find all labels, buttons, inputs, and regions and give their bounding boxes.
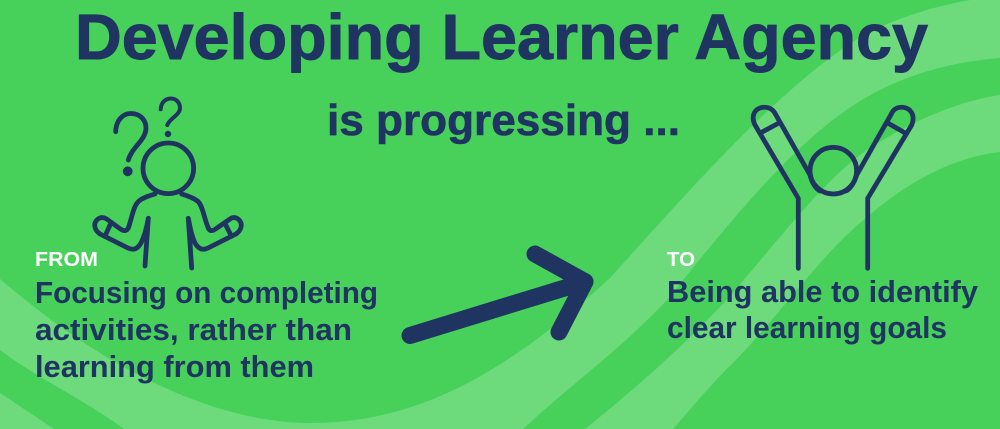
right arm and torso <box>182 194 241 268</box>
title: Developing Learner Agency <box>75 1 928 73</box>
right cuff <box>888 123 906 133</box>
to description: Being able to identify <box>667 274 979 309</box>
left cuff <box>762 123 778 132</box>
left cuff <box>106 225 110 234</box>
from description: learning from them <box>35 349 314 384</box>
left arm and leg <box>753 107 810 268</box>
TO label: TO <box>667 249 695 271</box>
from description: Focusing on completing <box>35 275 378 310</box>
body join <box>810 175 820 191</box>
small question mark <box>161 98 180 125</box>
FROM label: FROM <box>35 249 98 271</box>
icon: confused person with question marks <box>95 98 241 268</box>
left arm and torso <box>95 194 155 266</box>
right cuff <box>226 225 230 233</box>
to description <box>667 274 979 345</box>
subtitle: is progressing ... <box>327 96 680 145</box>
from description: activities, rather than <box>35 312 352 347</box>
head <box>810 147 857 194</box>
big question mark <box>116 114 146 160</box>
head <box>143 143 194 194</box>
to description: clear learning goals <box>667 310 947 345</box>
background wave: lower band left <box>0 393 54 429</box>
arrow <box>410 254 585 336</box>
right arm and leg <box>857 107 913 268</box>
icon: person with raised arms <box>753 107 913 268</box>
from description <box>35 275 378 384</box>
background wave: lower band right <box>585 95 1000 429</box>
